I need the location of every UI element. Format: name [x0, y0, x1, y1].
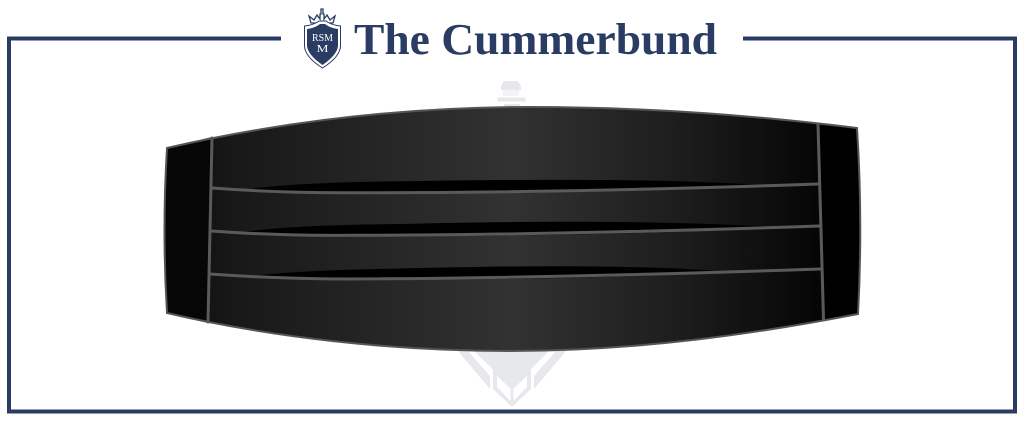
band outline: [164, 107, 860, 351]
monogram: M: [316, 43, 329, 55]
band body: [164, 107, 860, 351]
shield outline: [304, 21, 340, 68]
seams: [208, 124, 824, 322]
monogram: [312, 32, 333, 55]
logo shield: [304, 9, 340, 68]
title: The Cummerbund: [354, 15, 717, 64]
right end panel: [818, 123, 860, 320]
pleat shadows: [235, 180, 790, 279]
monogram: RSM: [312, 32, 333, 44]
left end panel: [164, 137, 212, 323]
cummerbund: [164, 107, 860, 351]
shield fill: [307, 24, 338, 65]
logo watermark behind the band: [457, 81, 567, 407]
crown: [309, 9, 335, 23]
